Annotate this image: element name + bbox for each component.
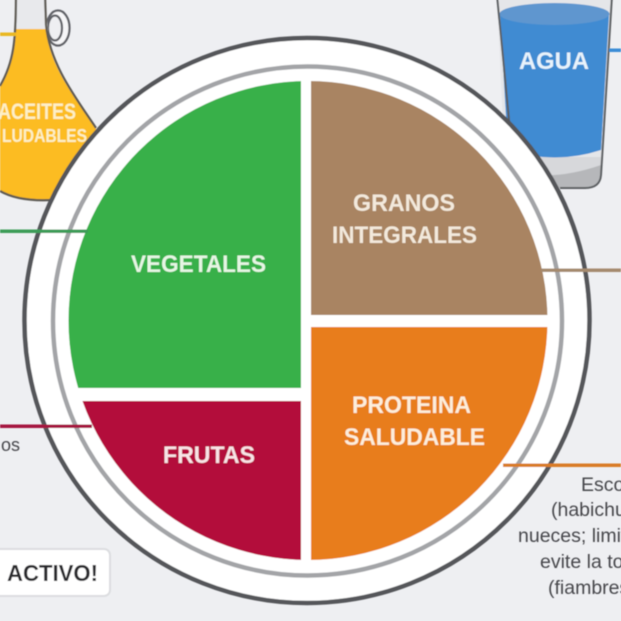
connector: aceites <box>0 32 16 36</box>
icon: oil jug <box>0 0 110 201</box>
label: proteina saludable <box>344 392 485 451</box>
icon: jug handle <box>46 10 70 46</box>
callout: activo <box>0 549 110 596</box>
connector: frutas <box>0 424 92 428</box>
text: proteina note <box>518 474 621 599</box>
glass label: AGUA <box>519 48 589 75</box>
section: granos integrales <box>311 70 556 315</box>
label: granos integrales: GRANOS <box>353 190 455 217</box>
callout: activo: ACTIVO! <box>7 560 98 586</box>
label: vegetales: VEGETALES <box>131 251 266 278</box>
section: vegetales <box>60 70 301 388</box>
connector: proteina <box>503 464 621 467</box>
label: granos integrales <box>332 190 477 249</box>
jug label: LUDABLES <box>2 126 87 146</box>
connector: agua <box>609 48 621 52</box>
section: frutas <box>82 400 302 561</box>
label: granos integrales: INTEGRALES <box>332 222 477 249</box>
jug label <box>0 99 87 146</box>
label: frutas: FRUTAS <box>163 442 255 469</box>
label: proteina saludable: SALUDABLE <box>344 424 485 451</box>
label: proteina saludable: PROTEINA <box>352 392 471 419</box>
connector: granos <box>541 268 621 272</box>
icon: water glass <box>497 0 612 188</box>
jug label: ACEITES <box>0 99 76 124</box>
section: proteina saludable <box>311 327 556 572</box>
text: frutas note: os <box>1 435 20 455</box>
connector: vegetales <box>0 230 88 233</box>
